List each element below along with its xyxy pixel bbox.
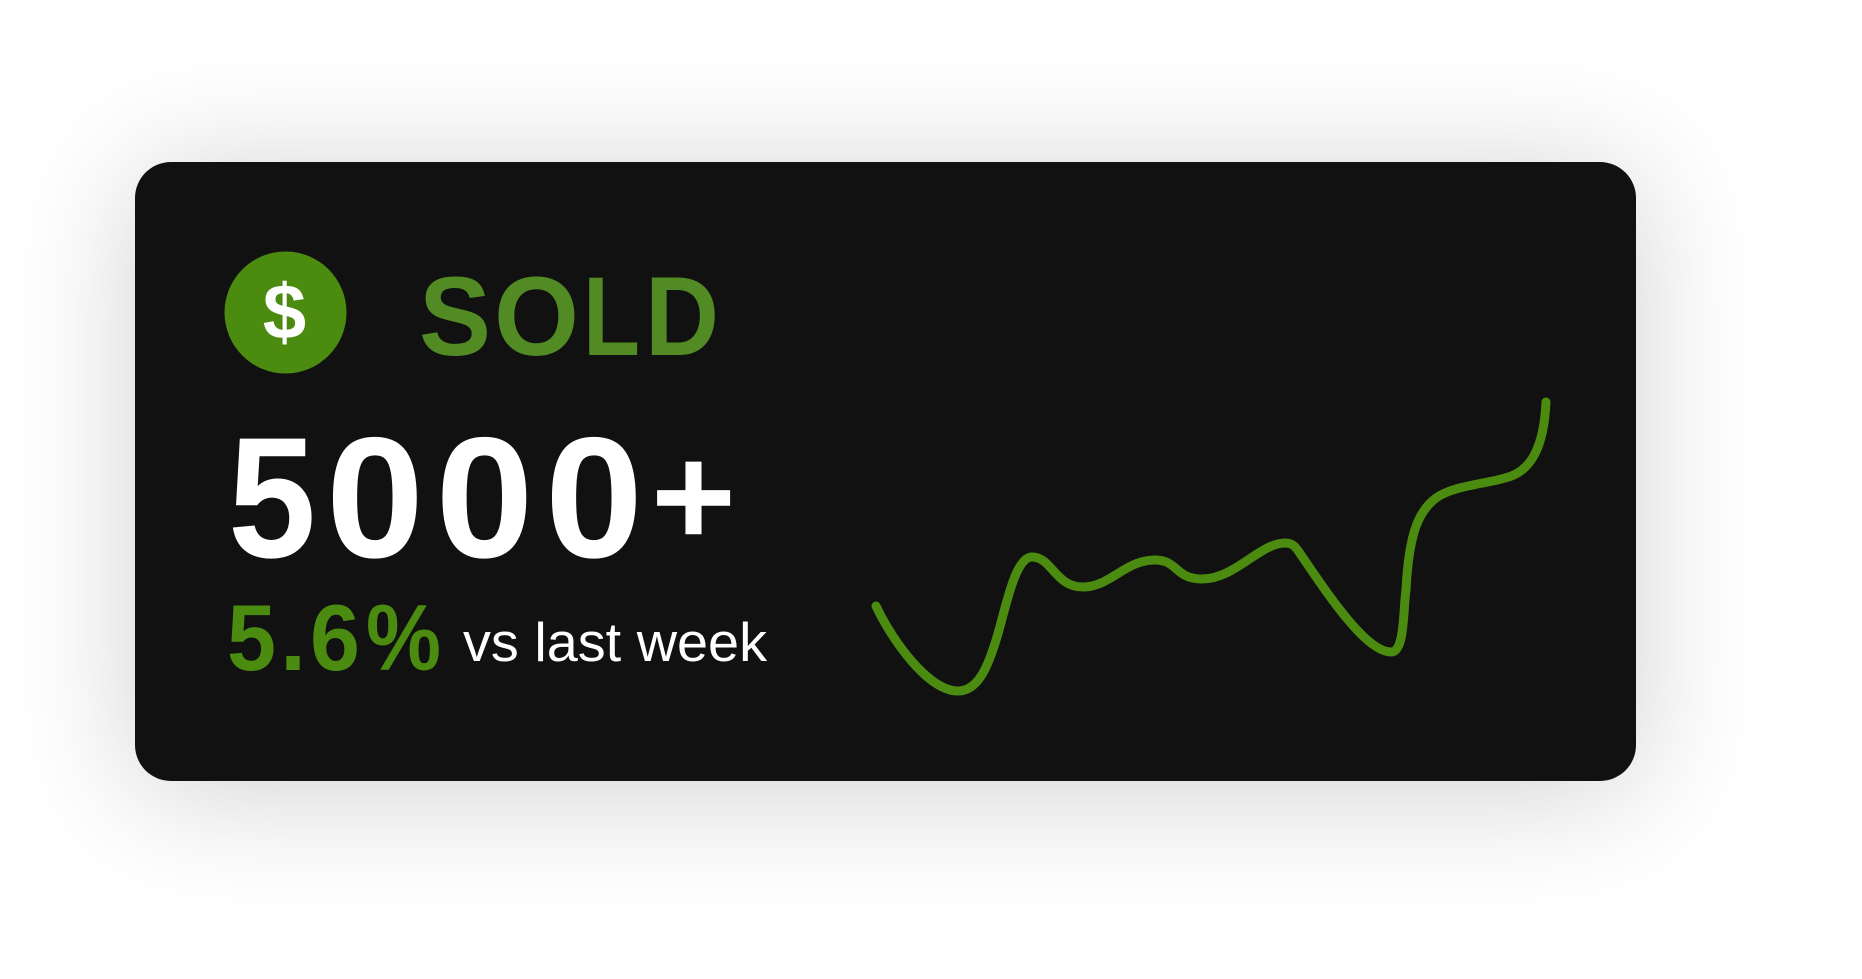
change percentage: 5.6%: 5 xyxy=(227,585,276,690)
change percentage: 5.6% xyxy=(227,585,441,690)
change percentage: 5.6%: . xyxy=(280,585,306,690)
big number: 5000+: + xyxy=(651,418,736,576)
heading: SOLD: L xyxy=(583,254,640,379)
heading: SOLD: O xyxy=(494,254,579,379)
big number: 5000+: 0 xyxy=(326,402,424,594)
heading: SOLD: D xyxy=(645,254,719,379)
heading: SOLD: S xyxy=(419,254,491,379)
big number: 5000+: 5 xyxy=(228,402,316,594)
panel: stat card xyxy=(135,162,1636,781)
icon: dollar coin xyxy=(224,252,346,374)
big number: 5000+: 0 xyxy=(436,402,534,594)
big number: 5000+: 0 xyxy=(545,402,643,594)
comparison label: vs last week: vs last week xyxy=(463,611,768,673)
big number: 5000+ xyxy=(228,402,736,594)
change percentage: 5.6%: % xyxy=(366,585,441,690)
line chart: sparkline xyxy=(876,402,1546,691)
icon: dollar coin: $ xyxy=(263,268,306,356)
heading: SOLD xyxy=(419,254,719,379)
change percentage: 5.6%: 6 xyxy=(310,585,360,690)
